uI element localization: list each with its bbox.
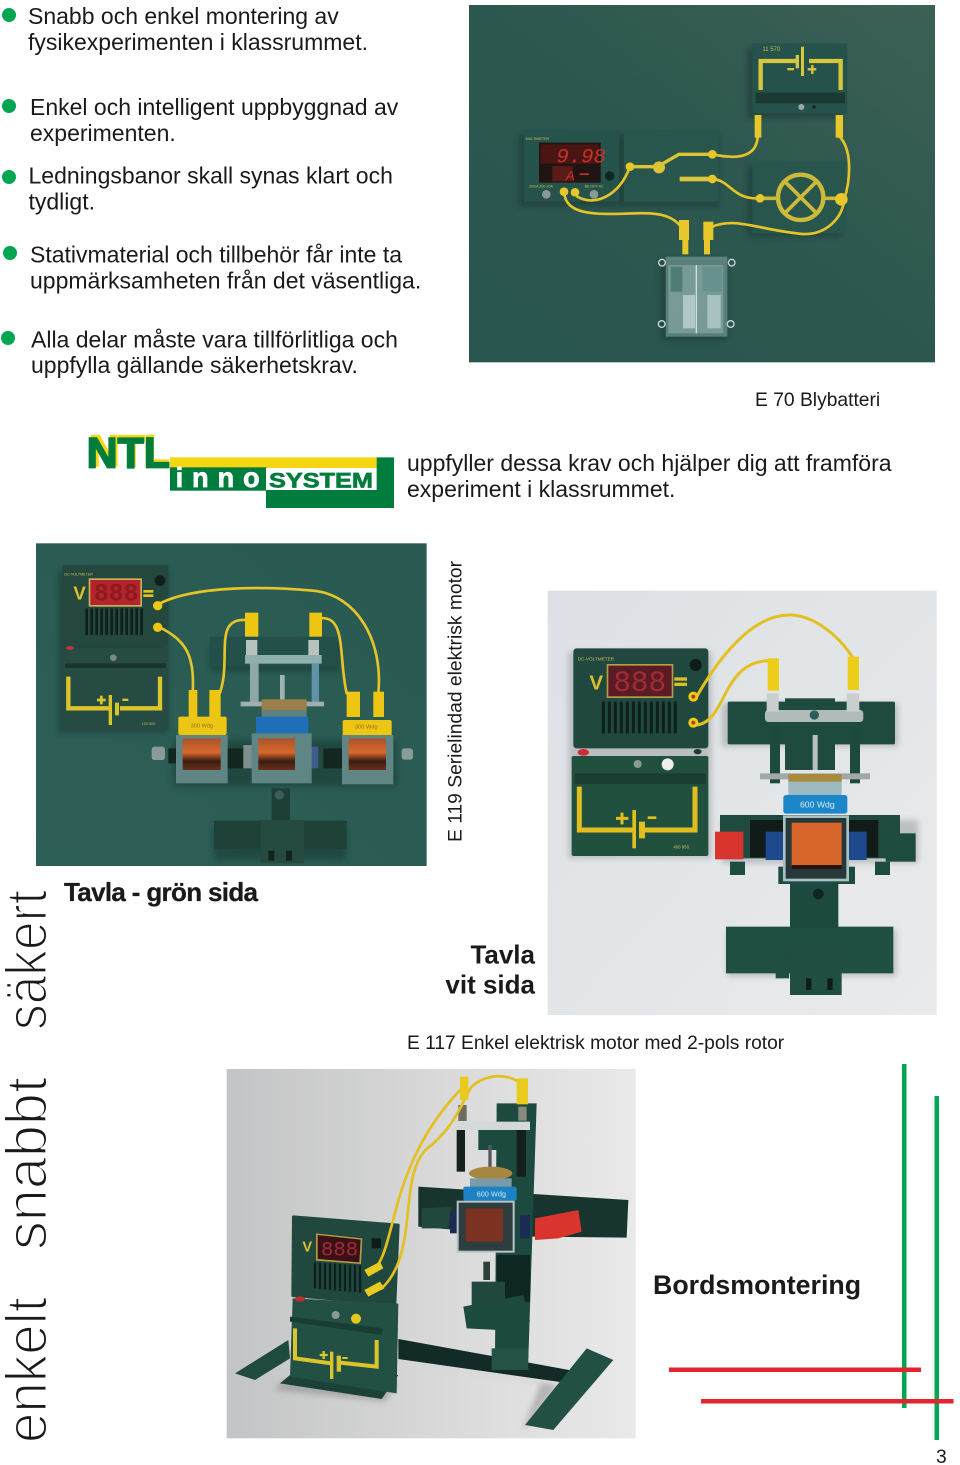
bullet: säkerhetskrav <box>1 326 398 378</box>
heading: Tavla vit sida <box>445 940 536 1000</box>
bullet: ledningsbanor: tydligt. <box>28 188 95 214</box>
bullet: stativmaterial <box>3 242 421 294</box>
bullet: stativmaterial: uppmärksamheten från det väsentliga. <box>30 268 421 294</box>
centre coil <box>252 717 312 783</box>
ammeter module: MULTIMETER <box>526 137 550 141</box>
left coil <box>176 717 228 783</box>
left coil: 300 Wdg <box>191 724 213 730</box>
intro text: uppfyller dessa krav <box>407 450 892 502</box>
caption: E 117: E 117 Enkel elektrisk motor med 2-pols rotor <box>407 1033 785 1054</box>
voltmeter module: 888 <box>321 1240 358 1263</box>
battery module: 400 950 <box>673 844 690 849</box>
plugs <box>560 115 848 254</box>
bullet list <box>1 3 421 378</box>
bullet: säkerhetskrav: uppfylla gällande säkerhetskrav. <box>31 352 358 378</box>
ammeter module: A <box>565 167 575 183</box>
motor frame <box>760 693 870 797</box>
voltmeter module <box>293 1217 398 1304</box>
vertical slogan: enkelt snabbt säkert <box>0 890 60 1443</box>
logo: NTL innoSYSTEM: inno <box>176 462 260 493</box>
battery module: 12V 500 <box>142 722 155 726</box>
rotor and coil: 600 Wdg <box>477 1190 506 1199</box>
bullet: säkerhetskrav: Alla delar måste vara tillförlitliga och <box>31 326 398 352</box>
ammeter module: 9.98 <box>556 146 606 169</box>
plugs and jacks <box>688 657 859 728</box>
rotated caption: E 119 Serielindad elektrisk motor: E 119 Serielindad elektrisk motor <box>446 560 466 842</box>
photo: E 70 Blybatteri circuit <box>469 5 935 362</box>
bullet: uppbyggnad: Enkel och intelligent uppbyggnad av <box>30 94 399 120</box>
bullet: uppbyggnad: experimenten. <box>30 120 176 146</box>
coil assembly on rail <box>715 795 916 884</box>
caption: E 70 Blybatteri: E 70 Blybatteri <box>755 390 880 411</box>
ammeter module: BE OFF AC <box>585 184 604 188</box>
rail between coils <box>152 745 413 768</box>
bullet: montering: Snabb och enkel montering av <box>28 3 339 29</box>
heading: Tavla vit sida: Tavla <box>470 940 536 970</box>
ammeter module: 20mA 200 20A <box>529 184 554 188</box>
voltmeter module <box>573 648 708 748</box>
bullet: uppbyggnad <box>2 94 399 146</box>
bullet: montering: fysikexperimenten i klassrummet. <box>28 29 368 55</box>
heading: Bordsmontering: Bordsmontering <box>653 1270 861 1300</box>
heading: Tavla - grön sida: Tavla - grön sida <box>64 877 259 907</box>
lead battery cell <box>658 257 735 337</box>
voltmeter module: V <box>73 582 86 603</box>
coil assembly on rail: 600 Wdg <box>800 799 835 809</box>
lower support <box>214 788 347 863</box>
logo: NTL innoSYSTEM: NTL <box>87 430 170 478</box>
wires <box>372 1076 520 1288</box>
table base <box>235 1339 613 1430</box>
horizontal rail <box>418 1187 628 1240</box>
wires <box>158 588 379 697</box>
voltmeter module: DC-VOLTMETER <box>64 572 93 576</box>
lower support <box>726 883 893 995</box>
logo: NTL innoSYSTEM: NTL <box>89 427 169 475</box>
rotor and coil <box>450 1105 530 1252</box>
photo: Tavla grön sida, E 119 series motor <box>36 543 427 866</box>
column <box>478 1103 537 1370</box>
plugs and jacks <box>153 601 384 717</box>
right coil <box>342 720 393 784</box>
voltmeter module: 888 <box>94 581 138 609</box>
voltmeter module: 888 <box>613 667 666 700</box>
rear rail <box>728 702 895 744</box>
battery module <box>62 646 168 730</box>
voltmeter module <box>62 565 168 645</box>
right coil: 300 Wdg <box>355 724 378 730</box>
battery module <box>572 749 708 856</box>
upper frame with rotor <box>210 637 337 717</box>
heading: Tavla vit sida: vit sida <box>445 970 536 1000</box>
bullet: ledningsbanor: Ledningsbanor skall synas klart och <box>28 162 393 188</box>
battery module <box>752 43 847 113</box>
ammeter module <box>524 131 619 202</box>
photo: Bordsmontering <box>227 1069 636 1438</box>
intro text: uppfyller dessa krav: experiment i klassrummet. <box>407 476 675 502</box>
switch module <box>624 131 719 202</box>
battery module: 11 570 <box>762 47 781 53</box>
bullet: montering <box>2 3 368 55</box>
voltmeter module: V <box>589 671 603 694</box>
bullet: ledningsbanor <box>2 162 393 214</box>
wires <box>697 615 853 725</box>
logo: NTL innoSYSTEM: SYSTEM <box>269 468 373 492</box>
clamp foot <box>463 1262 530 1330</box>
logo: NTL innoSYSTEM <box>87 427 394 508</box>
battery module <box>290 1296 398 1393</box>
photo: Tavla vit sida, E 117 motor <box>548 591 937 1015</box>
decorative green and red lines <box>669 1064 954 1440</box>
plugs <box>364 1077 528 1297</box>
lamp module <box>752 162 846 233</box>
bullet: stativmaterial: Stativmaterial och tillbehör får inte ta <box>30 242 402 268</box>
wires <box>564 135 849 234</box>
voltmeter module: V <box>302 1240 312 1256</box>
intro text: uppfyller dessa krav: uppfyller dessa krav och hjälper dig att framföra <box>407 450 892 476</box>
voltmeter module: DC-VOLTMETER <box>578 657 615 662</box>
